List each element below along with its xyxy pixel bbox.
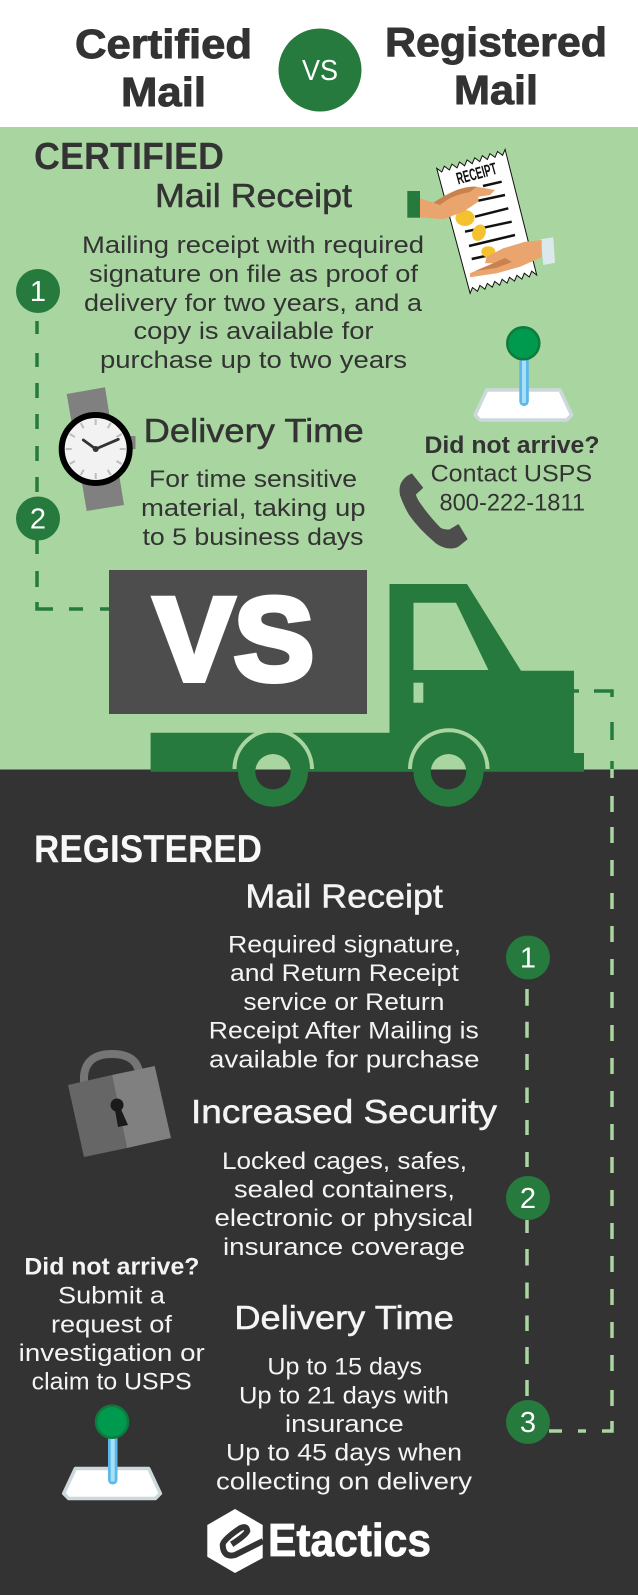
callout: request investigation: investigation or xyxy=(19,1340,205,1367)
text block: certified delivery time: For time sensitive xyxy=(149,466,357,493)
heading: Registered Mail: Mail xyxy=(454,67,538,113)
icon: receipt with hands and coins xyxy=(407,149,555,293)
heading: REGISTERED: REGISTERED xyxy=(34,828,262,871)
truck rear wheel xyxy=(234,730,312,807)
heading: Registered Mail: Registered xyxy=(385,19,607,65)
text block: registered delivery time: insurance xyxy=(285,1411,404,1438)
text block: certified mail receipt xyxy=(82,177,424,374)
text block: certified mail receipt: copy is available for xyxy=(134,318,374,345)
icon: wristwatch xyxy=(62,387,136,511)
callout: request investigation: Submit a xyxy=(58,1283,165,1310)
panel: header xyxy=(0,0,638,127)
callout: request investigation: request of xyxy=(51,1311,172,1338)
text block: registered mail receipt: Mail Receipt xyxy=(245,877,443,914)
text block: registered mail receipt: available for purchase xyxy=(209,1046,480,1074)
text block: certified mail receipt: Mail Receipt xyxy=(155,177,352,214)
text block: increased security: Locked cages, safes, xyxy=(222,1148,467,1175)
badge: VS circle xyxy=(278,28,362,112)
text block: registered mail receipt: service or Return xyxy=(243,989,444,1016)
text block: increased security: insurance coverage xyxy=(223,1234,465,1261)
heading: Certified Mail: Certified xyxy=(75,21,252,67)
text block: registered delivery time: Delivery Time xyxy=(234,1299,454,1336)
text block: certified delivery time xyxy=(141,412,366,551)
text block: registered delivery time: collecting on delivery xyxy=(216,1469,473,1496)
step marker 2 xyxy=(16,496,60,540)
text block: increased security xyxy=(191,1093,498,1261)
step marker 2 xyxy=(506,1176,550,1220)
callout: request investigation: Did not arrive? xyxy=(24,1254,199,1281)
text block: registered delivery time: Up to 15 days xyxy=(267,1354,422,1380)
step marker 3 xyxy=(506,1400,550,1444)
text block: registered delivery time: Up to 45 days when xyxy=(226,1440,462,1466)
truck front wheel xyxy=(410,730,488,807)
text block: certified mail receipt: Mailing receipt with required xyxy=(82,232,424,259)
step marker 1 xyxy=(506,936,550,980)
text block: certified mail receipt: delivery for two years, and a xyxy=(84,290,422,317)
text block: registered mail receipt: Required signature, xyxy=(228,932,461,959)
icon: padlock xyxy=(68,1054,171,1157)
callout: request investigation: claim to USPS xyxy=(32,1369,192,1396)
text block: registered mail receipt: Receipt After Mailing is xyxy=(209,1018,479,1045)
timeline: connecting dashed path xyxy=(549,691,612,1431)
heading: Registered Mail xyxy=(385,19,607,113)
callout: request investigation xyxy=(19,1254,205,1396)
icon: map pin xyxy=(475,327,572,420)
text block: certified mail receipt: signature on file as proof of xyxy=(89,261,418,288)
text block: increased security: electronic or physical xyxy=(214,1205,473,1232)
badge: VS circle: VS xyxy=(302,55,338,87)
step marker 2: 2 xyxy=(30,504,46,536)
panel: registered background xyxy=(0,770,638,1595)
illustration: truck xyxy=(151,584,584,807)
text block: increased security: Increased Security xyxy=(191,1093,498,1130)
step marker 2: 2 xyxy=(520,1183,536,1215)
text block: certified delivery time: to 5 business days xyxy=(142,524,364,551)
badge: large VS cargo box: VS xyxy=(154,574,314,706)
step marker 1 xyxy=(16,269,60,313)
callout: contact USPS xyxy=(424,432,600,517)
callout: contact USPS: Contact USPS xyxy=(431,461,592,488)
step marker 3: 3 xyxy=(520,1407,536,1439)
icon: receipt with hands and coins: RECEIPT xyxy=(454,159,499,188)
text block: certified delivery time: material, taking up xyxy=(141,495,366,522)
icon: telephone xyxy=(400,474,467,548)
step marker 1: 1 xyxy=(30,276,46,308)
heading: Certified Mail xyxy=(75,21,252,115)
step marker 1: 1 xyxy=(520,943,536,975)
callout: contact USPS: Did not arrive? xyxy=(424,432,600,459)
panel: certified background xyxy=(0,127,638,770)
logo: Etactics xyxy=(207,1509,431,1573)
text block: increased security: sealed containers, xyxy=(234,1176,455,1204)
callout: contact USPS: 800-222-1811 xyxy=(440,490,585,517)
heading: Certified Mail: Mail xyxy=(121,69,206,115)
text block: registered mail receipt xyxy=(209,877,480,1074)
icon: map pin xyxy=(64,1406,160,1498)
badge: large VS cargo box xyxy=(109,570,367,714)
logo: Etactics: Etactics xyxy=(268,1514,431,1566)
text block: certified mail receipt: purchase up to two years xyxy=(100,347,407,374)
text block: registered delivery time xyxy=(216,1299,473,1496)
text block: certified delivery time: Delivery Time xyxy=(144,412,364,449)
timeline: registered dashed path xyxy=(525,989,529,1396)
text block: registered mail receipt: and Return Receipt xyxy=(230,960,459,987)
timeline: certified dashed path xyxy=(37,321,109,609)
heading: CERTIFIED: CERTIFIED xyxy=(34,136,224,178)
text block: registered delivery time: Up to 21 days with xyxy=(239,1382,449,1410)
